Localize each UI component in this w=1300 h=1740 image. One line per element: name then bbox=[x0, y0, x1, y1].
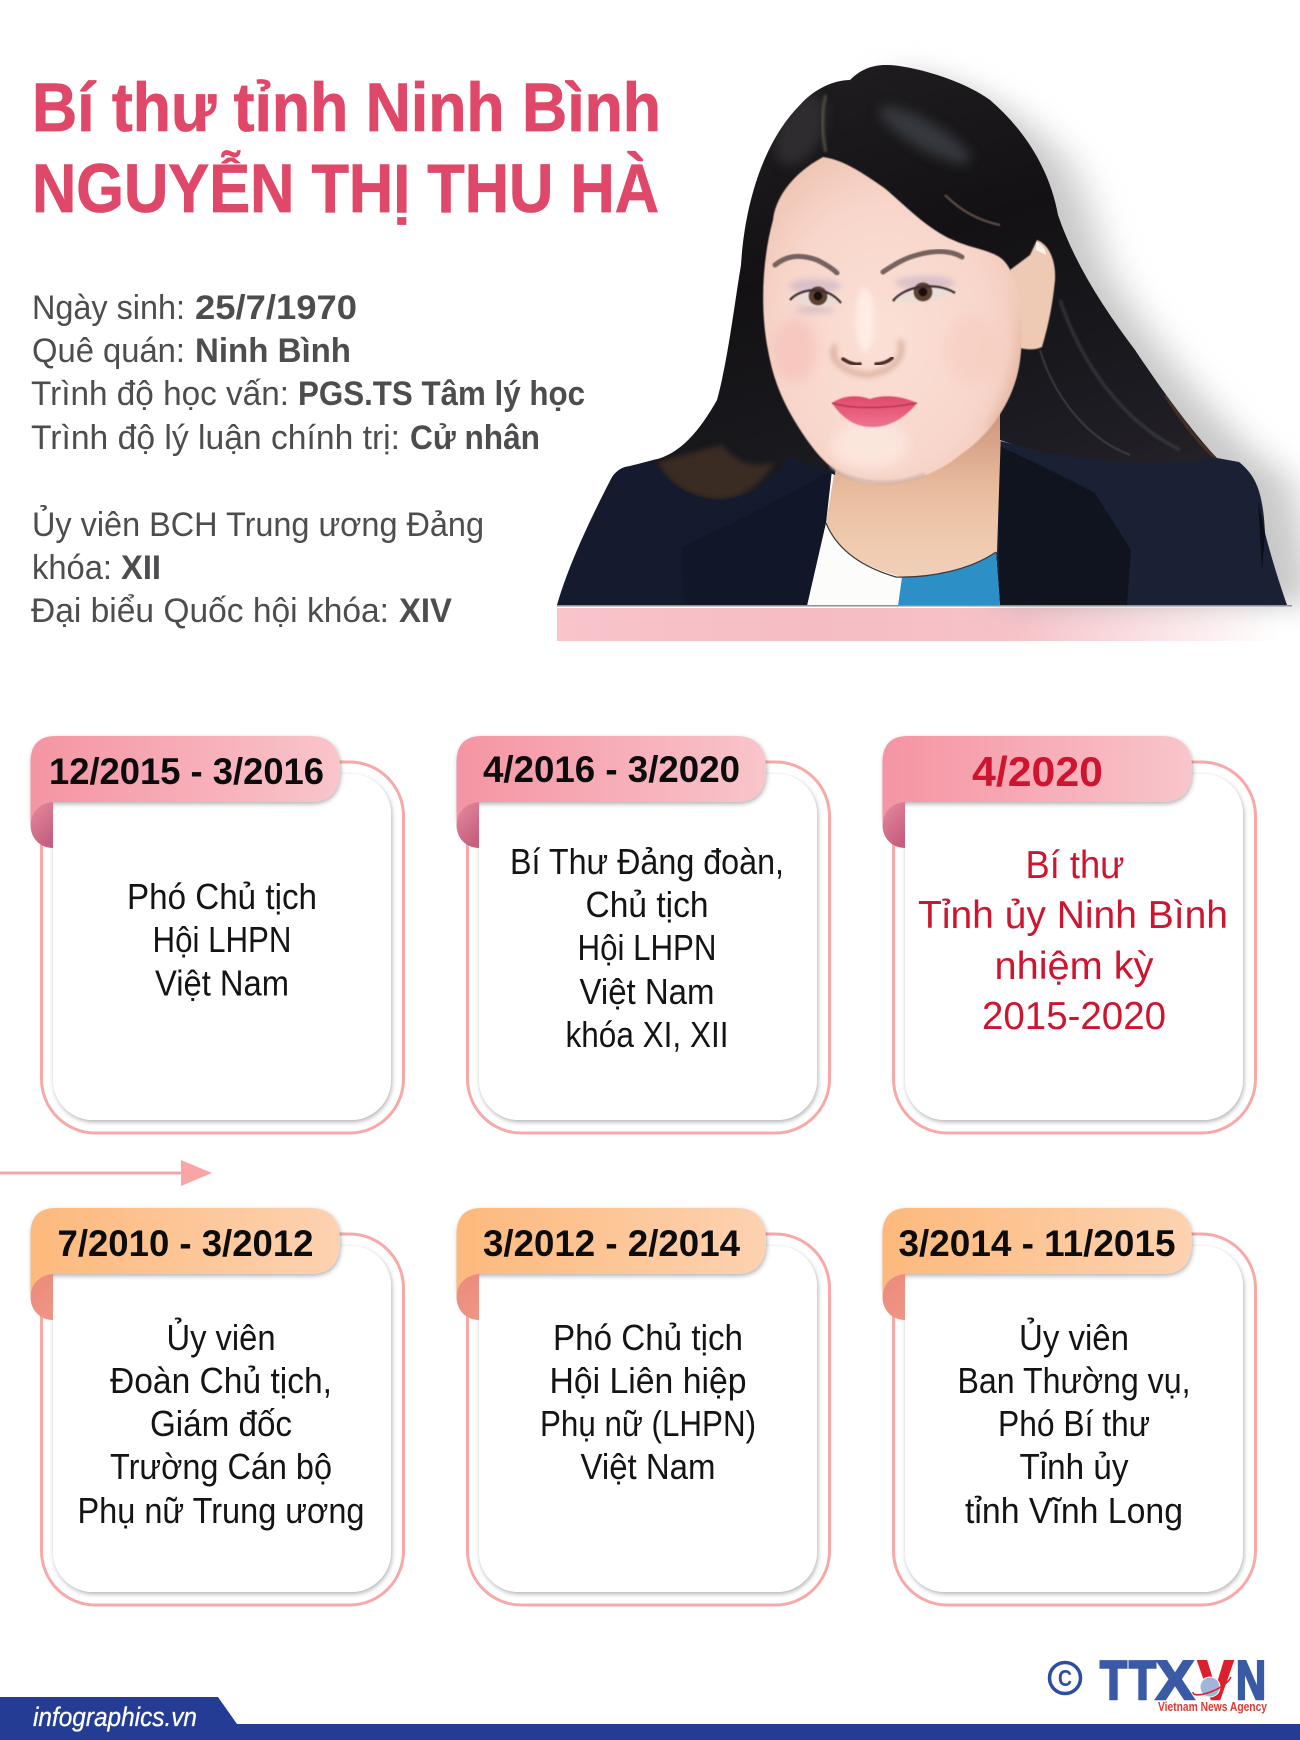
role text: Phụ nữ (LHPN) bbox=[540, 1403, 756, 1444]
logo globe bbox=[1193, 1677, 1231, 1697]
jacket left lapel bbox=[682, 470, 832, 606]
portrait base line bbox=[557, 605, 1292, 606]
jacket left bbox=[557, 440, 832, 606]
role text: Bí Thư Đảng đoàn, bbox=[510, 841, 784, 882]
role text: Đoàn Chủ tịch, bbox=[110, 1360, 332, 1401]
tab: date: 3/2014 - 11/2015 bbox=[898, 1223, 1176, 1264]
role text bbox=[510, 841, 784, 1055]
role text: 2015-2020 bbox=[982, 995, 1166, 1038]
jacket right lapel bbox=[997, 445, 1131, 606]
portrait illustration bbox=[557, 65, 1300, 606]
role text: Bí thư bbox=[1026, 844, 1124, 887]
personal information block: Ủy viên BCH Trung ương Đảng bbox=[32, 506, 484, 544]
personal information block: 25/7/1970 bbox=[195, 289, 357, 327]
tab: date bbox=[882, 1208, 1192, 1320]
role text: Ban Thường vụ, bbox=[958, 1360, 1190, 1401]
right eye bbox=[893, 282, 955, 302]
role text: Giám đốc bbox=[150, 1403, 292, 1444]
role text: Việt Nam bbox=[580, 1446, 716, 1487]
cheek tint bbox=[768, 320, 1022, 469]
icon: copyright symbol: C bbox=[1058, 1665, 1072, 1691]
logo: TTXVN bbox=[1100, 1649, 1268, 1714]
role text bbox=[918, 844, 1228, 1038]
role text: Việt Nam bbox=[155, 962, 289, 1004]
role text: Phụ nữ Trung ương bbox=[78, 1490, 364, 1531]
portrait drop shadow bbox=[890, 70, 1300, 605]
footer source text: infographics.vn bbox=[33, 1702, 197, 1732]
tab: date: 3/2012 - 2/2014 bbox=[483, 1223, 740, 1264]
role text: Phó Bí thư bbox=[998, 1403, 1150, 1444]
personal information block: khóa: bbox=[32, 549, 112, 587]
logo: TTXVN: T bbox=[1100, 1649, 1127, 1711]
jacket right bbox=[996, 440, 1287, 606]
role text: Phó Chủ tịch bbox=[127, 876, 317, 917]
icon: copyright symbol bbox=[1050, 1662, 1080, 1694]
role text: Trường Cán bộ bbox=[110, 1446, 332, 1487]
face bbox=[763, 157, 1022, 483]
personal information block: Cử nhân bbox=[410, 419, 540, 457]
role text: Tỉnh ủy Ninh Bình bbox=[918, 894, 1228, 937]
jacket folds bbox=[1258, 500, 1265, 570]
panel: 3/2014 - 11/2015 bbox=[882, 1208, 1256, 1605]
tab: date bbox=[30, 1208, 340, 1320]
title: NGUYỄN THỊ THU HÀ bbox=[32, 150, 659, 227]
logo: TTXVN: N bbox=[1236, 1649, 1266, 1711]
role text bbox=[958, 1316, 1190, 1531]
logo: TTXVN: Vietnam News Agency bbox=[1158, 1699, 1268, 1714]
personal information block: XII bbox=[121, 549, 161, 587]
personal information block: Quê quán: bbox=[32, 332, 185, 370]
personal information block: Ninh Bình bbox=[195, 332, 351, 370]
lips bbox=[832, 396, 917, 427]
personal information block: PGS.TS Tâm lý học bbox=[298, 375, 585, 413]
nose bbox=[833, 288, 901, 375]
role text: khóa XI, XII bbox=[566, 1014, 728, 1055]
role text bbox=[127, 876, 317, 1004]
tab: date bbox=[882, 736, 1192, 848]
personal information block: Trình độ học vấn: bbox=[31, 375, 289, 413]
panel: 4/2020 bbox=[882, 736, 1256, 1133]
tab: date bbox=[30, 736, 340, 848]
personal information block: Trình độ lý luận chính trị: bbox=[31, 419, 400, 457]
left eye bbox=[790, 286, 841, 306]
tab: date: 7/2010 - 3/2012 bbox=[58, 1223, 314, 1264]
personal information block: Ngày sinh: bbox=[32, 289, 185, 327]
role text: Tỉnh ủy bbox=[1020, 1446, 1128, 1487]
tab: date bbox=[456, 1208, 766, 1320]
eye shadow bbox=[789, 276, 955, 314]
role text: Chủ tịch bbox=[586, 884, 708, 925]
panel: 4/2016 - 3/2020 bbox=[456, 736, 830, 1133]
ear bbox=[1010, 240, 1055, 349]
role text: Việt Nam bbox=[580, 971, 714, 1012]
hair details, clipped to hair bbox=[657, 86, 1215, 499]
tab: date: 4/2020 bbox=[972, 748, 1103, 795]
footer bar bbox=[0, 1697, 1300, 1740]
panel: 3/2012 - 2/2014 bbox=[456, 1208, 830, 1605]
logo: TTXVN: V bbox=[1198, 1649, 1233, 1711]
arrow bbox=[0, 1160, 212, 1186]
hair back bbox=[653, 65, 1217, 500]
tab: date: 12/2015 - 3/2016 bbox=[49, 751, 324, 792]
role text: Hội Liên hiệp bbox=[550, 1360, 746, 1401]
blue top bbox=[898, 552, 1000, 606]
role text: Phó Chủ tịch bbox=[553, 1317, 743, 1358]
role text bbox=[540, 1317, 756, 1487]
eyebrows bbox=[775, 251, 962, 273]
role text: Ủy viên bbox=[1019, 1316, 1129, 1358]
logo: TTXVN: T bbox=[1129, 1649, 1156, 1711]
collar line bbox=[826, 523, 996, 577]
role text: Hội LHPN bbox=[152, 919, 292, 960]
role text: tỉnh Vĩnh Long bbox=[965, 1490, 1183, 1531]
logo: TTXVN: X bbox=[1156, 1649, 1194, 1711]
neck bbox=[826, 400, 1002, 577]
title bbox=[32, 69, 661, 227]
panel: 7/2010 - 3/2012 bbox=[30, 1208, 404, 1605]
ear highlight bbox=[1036, 242, 1046, 255]
white shirt bbox=[807, 523, 902, 606]
panel: 12/2015 - 3/2016 bbox=[30, 736, 404, 1133]
hair shine bbox=[878, 103, 972, 168]
personal information block: XIV bbox=[399, 592, 452, 630]
role text: Hội LHPN bbox=[578, 927, 716, 968]
brown hair ends bbox=[657, 445, 775, 499]
title: Bí thư tỉnh Ninh Bình bbox=[32, 69, 661, 146]
tab: date: 4/2016 - 3/2020 bbox=[483, 749, 740, 790]
personal information block bbox=[31, 289, 585, 630]
pink band under portrait bbox=[557, 608, 1300, 641]
personal information block: Đại biểu Quốc hội khóa: bbox=[31, 592, 389, 630]
chin edge bbox=[830, 466, 925, 482]
tab: date bbox=[456, 736, 766, 848]
role text: Ủy viên bbox=[166, 1316, 276, 1358]
role text bbox=[78, 1316, 364, 1531]
role text: nhiệm kỳ bbox=[994, 945, 1154, 988]
